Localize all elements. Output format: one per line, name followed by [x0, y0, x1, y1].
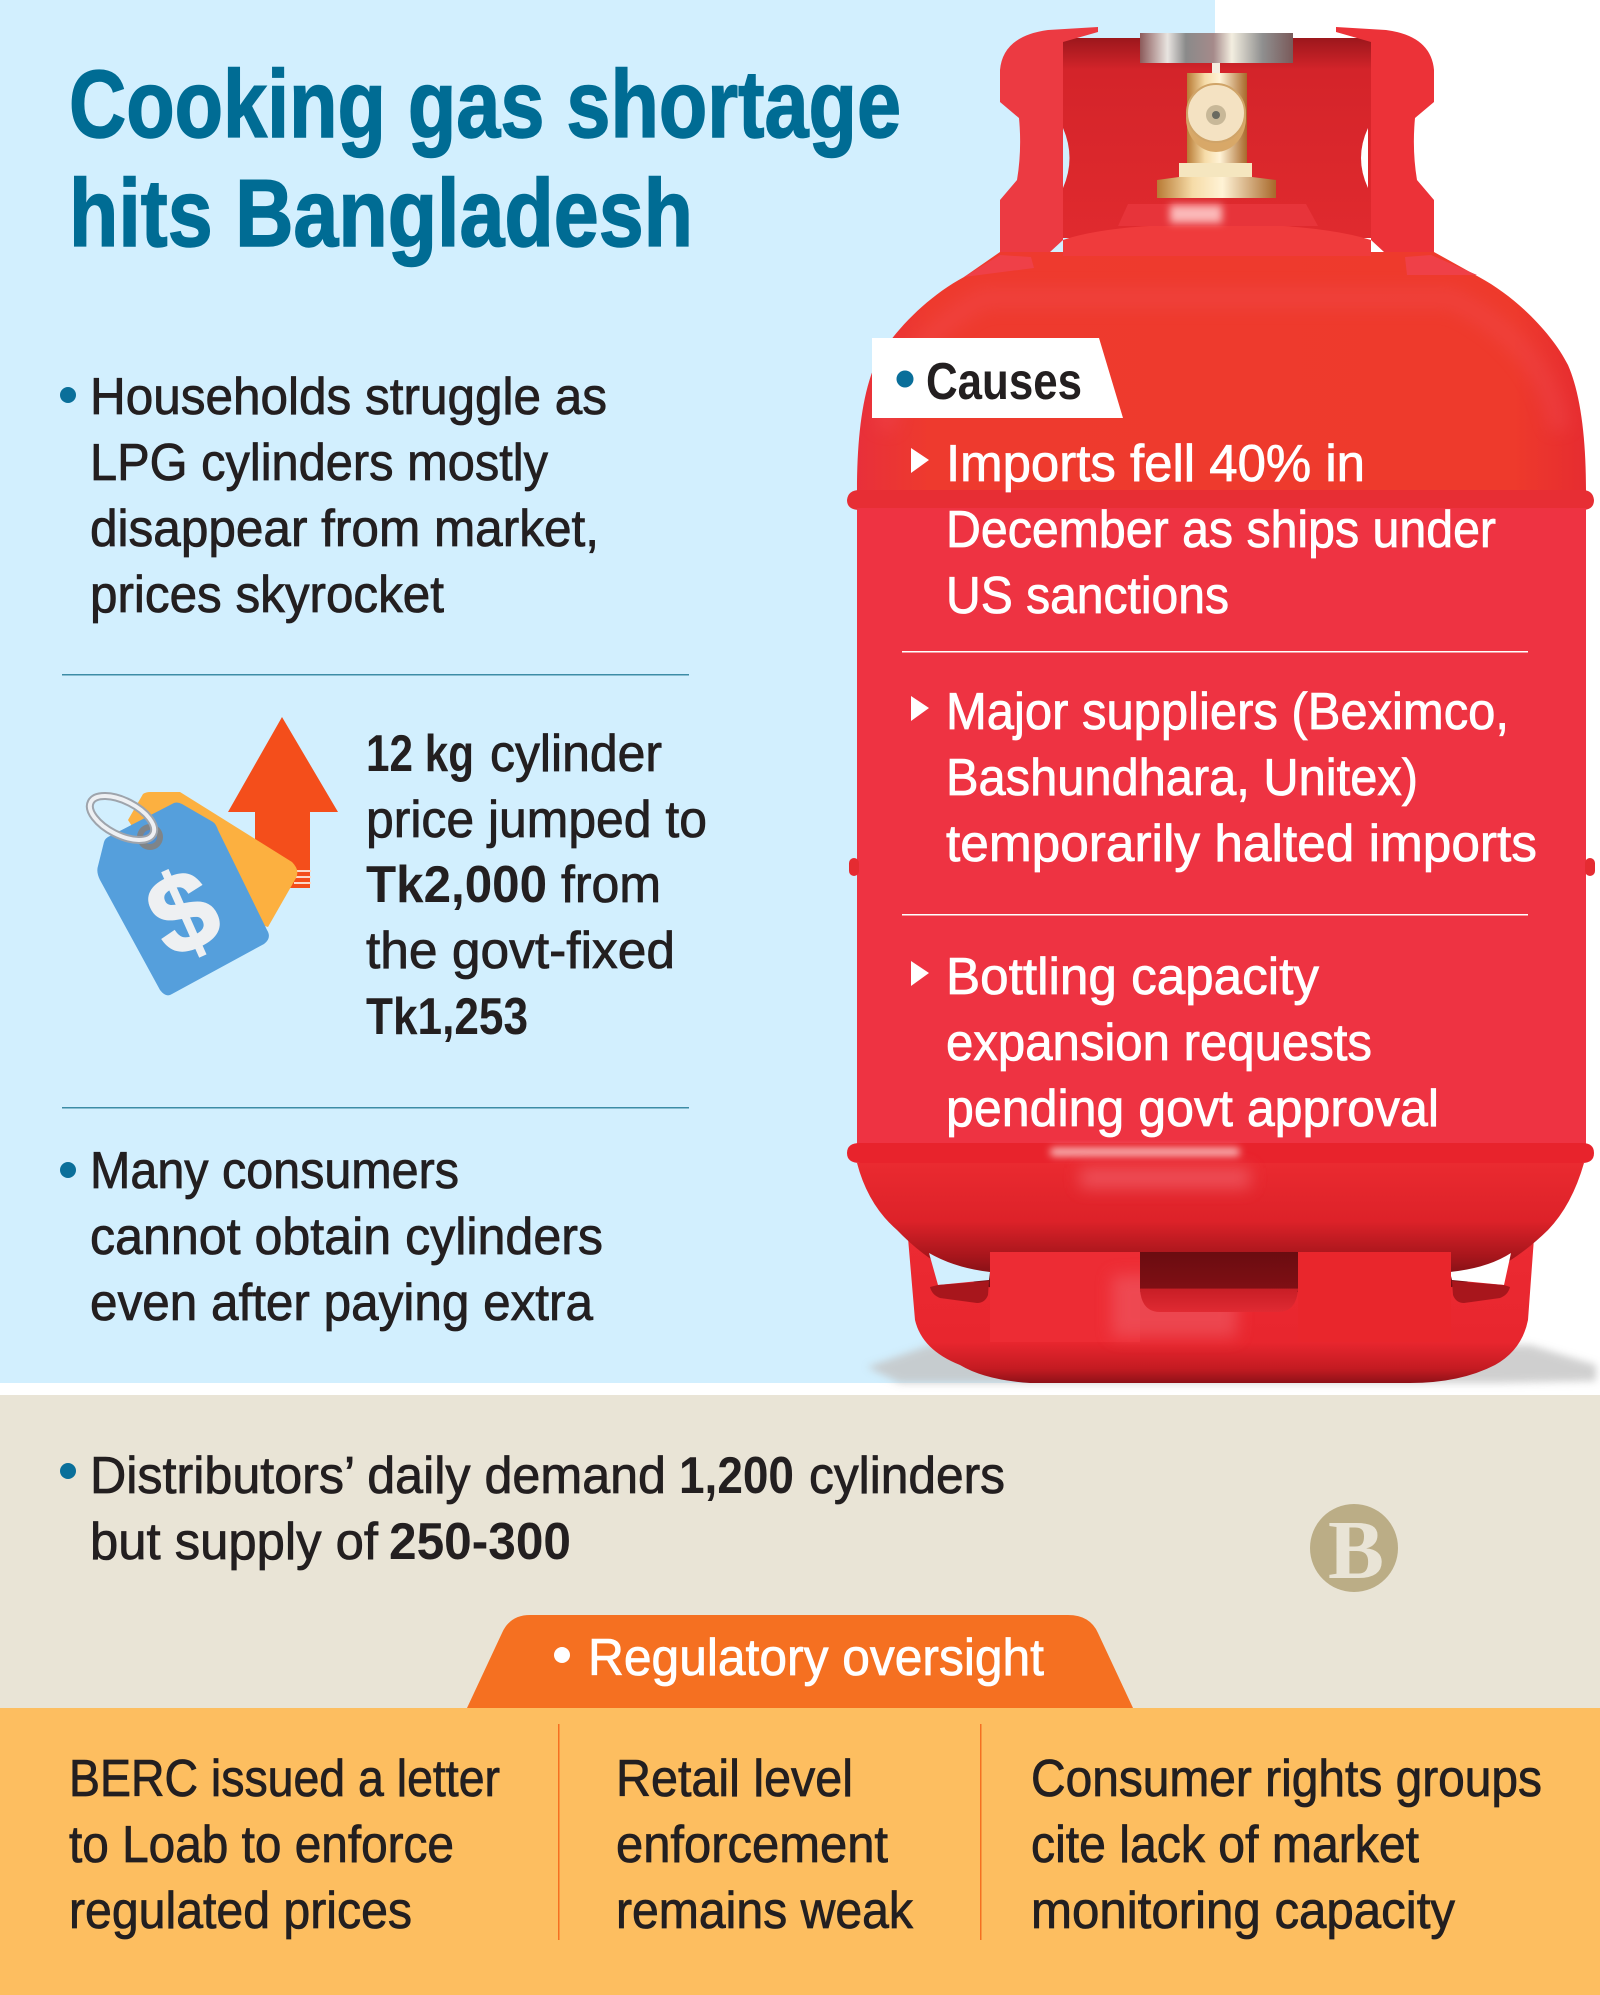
background: light blue panel: [0, 0, 1215, 1383]
text block: retail enforcement: Retail level: [616, 1750, 853, 1808]
text block: many consumers: Many consumers: [90, 1142, 459, 1200]
title: Cooking gas shortage: [69, 51, 901, 158]
cause: suppliers halted: Bashundhara, Unitex): [946, 749, 1418, 807]
background: orange band: [0, 1708, 1600, 1995]
text block: households struggle: prices skyrocket: [90, 566, 445, 624]
text block: cylinder price: [366, 725, 707, 1046]
text block: consumer rights: monitoring capacity: [1031, 1882, 1455, 1940]
text block: retail enforcement: enforcement: [616, 1816, 889, 1874]
background: beige panel: [0, 1395, 1600, 1708]
text block: households struggle: [60, 368, 607, 624]
logo: [1310, 1504, 1398, 1597]
text block: many consumers: cannot obtain cylinders: [90, 1208, 603, 1266]
cause: bottling capacity: Bottling capacity: [946, 948, 1319, 1006]
text block: consumer rights: cite lack of market: [1031, 1816, 1420, 1874]
text block: BERC letter: BERC issued a letter: [69, 1750, 500, 1808]
text block: distributors demand: but supply of: [90, 1513, 379, 1571]
icon: price tag with up arrow: $: [129, 843, 237, 982]
cause: bottling capacity: pending govt approval: [946, 1080, 1439, 1138]
cause: suppliers halted: temporarily halted imports: [946, 815, 1537, 873]
text block: cylinder price: Tk1,253: [366, 988, 528, 1046]
label: causes: [872, 338, 1123, 418]
text block: cylinder price: cylinder: [490, 725, 662, 783]
text block: distributors demand: [60, 1447, 1005, 1571]
text block: many consumers: [60, 1142, 603, 1332]
cause: suppliers halted: [911, 683, 1537, 873]
text block: cylinder price: 12 kg: [366, 725, 474, 783]
text block: BERC letter: to Loab to enforce: [69, 1816, 454, 1874]
text block: cylinder price: Tk2,000: [366, 856, 547, 914]
text block: households struggle: LPG cylinders mostly: [90, 434, 548, 492]
text block: consumer rights: [1031, 1750, 1542, 1940]
text block: many consumers: even after paying extra: [90, 1274, 593, 1332]
text block: retail enforcement: remains weak: [616, 1882, 914, 1940]
text block: distributors demand: 1,200: [679, 1447, 794, 1505]
logo: B: [1328, 1504, 1384, 1597]
text block: households struggle: Households struggle as: [90, 368, 607, 426]
text block: distributors demand: Distributors’ daily demand: [90, 1447, 666, 1505]
illustration: red LPG cylinder: [847, 27, 1596, 1383]
text block: cylinder price: price jumped to: [366, 791, 707, 849]
text block: consumer rights: Consumer rights groups: [1031, 1750, 1542, 1808]
title: [69, 51, 901, 267]
cause: imports fell: US sanctions: [946, 567, 1229, 625]
heading tab: regulatory oversight: [467, 1615, 1133, 1708]
text block: distributors demand: 250-300: [389, 1513, 571, 1571]
label: causes: Causes: [926, 353, 1082, 411]
cause: imports fell: December as ships under: [946, 501, 1496, 559]
heading tab: regulatory oversight: Regulatory oversight: [588, 1629, 1045, 1687]
text block: BERC letter: [69, 1750, 500, 1940]
title: hits Bangladesh: [69, 160, 693, 267]
cause: bottling capacity: expansion requests: [946, 1014, 1372, 1072]
text block: cylinder price: the govt-fixed: [366, 922, 675, 980]
cause: suppliers halted: Major suppliers (Beximco,: [946, 683, 1509, 741]
text block: cylinder price: from: [561, 856, 661, 914]
icon: price tag with up arrow: [83, 717, 338, 995]
cause: bottling capacity: [911, 948, 1439, 1138]
text block: households struggle: disappear from market,: [90, 500, 599, 558]
cause: imports fell: [911, 435, 1496, 625]
text block: distributors demand: cylinders: [809, 1447, 1005, 1505]
cause: imports fell: Imports fell 40% in: [946, 435, 1365, 493]
text block: BERC letter: regulated prices: [69, 1882, 412, 1940]
text block: retail enforcement: [616, 1750, 914, 1940]
